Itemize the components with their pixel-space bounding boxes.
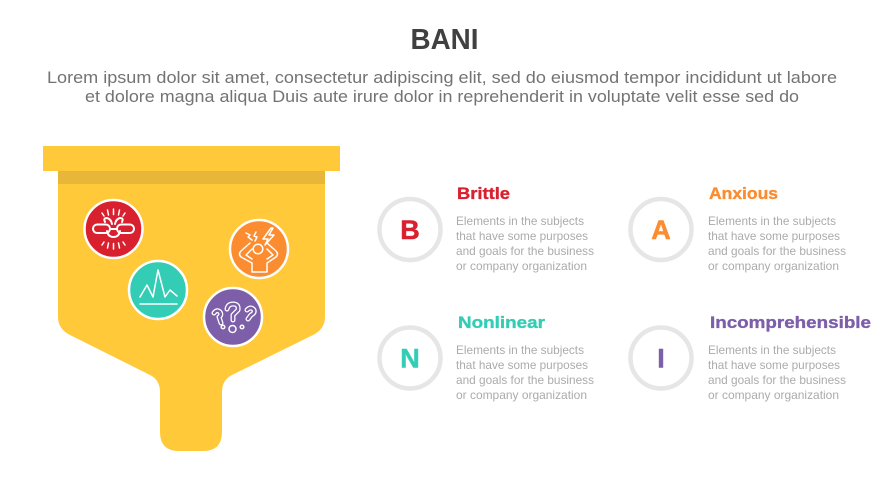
description: Elements in the subjects (708, 344, 836, 357)
subtitle (47, 68, 837, 106)
item: Incomprehensible (630, 314, 871, 402)
description: that have some purposes (708, 230, 840, 243)
letter badge B (380, 199, 440, 260)
funnel rim (43, 146, 340, 171)
description: Elements in the subjects (708, 215, 836, 228)
description: and goals for the business (708, 374, 846, 387)
heading: Nonlinear (458, 314, 546, 332)
icon: broken chain (84, 200, 142, 258)
icon: anxious person (230, 220, 288, 278)
subtitle: et dolore magna aliqua Duis aute irure dolor in reprehenderit in voluptate velit esse sed do (85, 87, 799, 106)
letter badge I: I (657, 344, 665, 374)
heading: Brittle (457, 185, 510, 203)
item: Brittle (380, 185, 594, 273)
description: Elements in the subjects (456, 215, 584, 228)
letter badge A: A (651, 215, 671, 245)
funnel neck shadow (58, 171, 325, 184)
heading: Anxious (709, 185, 778, 203)
letter badge B: B (400, 215, 420, 245)
description: that have some purposes (456, 359, 588, 372)
title: BANI (410, 24, 478, 56)
letter badge I (630, 328, 692, 388)
description: and goals for the business (456, 245, 594, 258)
icon: question marks (204, 288, 262, 346)
description: or company organization (708, 260, 839, 273)
description: and goals for the business (708, 245, 846, 258)
description: or company organization (456, 260, 587, 273)
letter badge A (630, 199, 692, 260)
description: or company organization (456, 389, 587, 402)
question marks inner (214, 304, 254, 323)
question dots (221, 325, 244, 332)
description (708, 344, 846, 402)
funnel body (58, 171, 325, 451)
icon: nonlinear chart (129, 261, 187, 319)
letter badge N (380, 328, 440, 388)
description: Elements in the subjects (456, 344, 584, 357)
funnel (43, 146, 340, 451)
description: and goals for the business (456, 374, 594, 387)
heading: Incomprehensible (710, 314, 871, 332)
description: or company organization (708, 389, 839, 402)
description: that have some purposes (708, 359, 840, 372)
question marks outline (214, 304, 254, 323)
description (708, 215, 846, 273)
letter badge N: N (400, 344, 420, 374)
item: Anxious (630, 185, 846, 273)
description (456, 344, 594, 402)
description: that have some purposes (456, 230, 588, 243)
item: Nonlinear (380, 314, 594, 402)
description (456, 215, 594, 273)
subtitle: Lorem ipsum dolor sit amet, consectetur adipiscing elit, sed do eiusmod tempor incididunt ut labore (47, 68, 837, 87)
